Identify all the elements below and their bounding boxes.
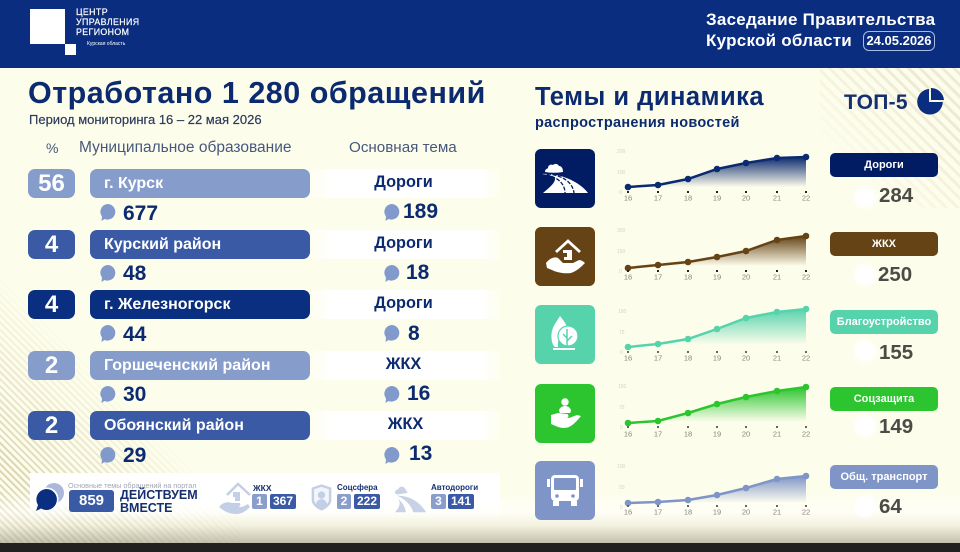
tile: landscaping icon [535,305,595,364]
column heading: municipality: Муниципальное образование [79,139,291,156]
logo text: РЕГИОНОМ [76,27,129,37]
date badge: 24.05.2026 [866,33,932,48]
logo squares [30,9,76,55]
chart: landscaping: 17 [654,354,662,362]
row: Kursk: г. Курск [104,175,163,192]
topic: roads: 141 [451,494,471,508]
topic: roads: Автодороги [431,483,478,492]
row: Zheleznogorsk: 44 [123,323,146,346]
chart: social protection: 75 [619,405,625,411]
logo text: УПРАВЛЕНИЯ [76,17,140,27]
chart: public transport [617,464,810,516]
chart: roads: 21 [773,194,781,202]
portal total: 859 [79,492,104,509]
chart: roads: 20 [742,194,750,202]
row: Zheleznogorsk [28,290,494,346]
tile: roads icon [535,149,595,208]
topic: housing [252,483,296,509]
chart: public transport: 16 [624,508,632,516]
row: Gorshechnoye district [28,351,494,406]
top 5 item: public transport: Общ. транспорт [840,471,928,483]
row: Gorshechnoye district: 16 [407,382,430,405]
row: Kursk: 677 [123,202,158,225]
chart: housing [617,228,810,282]
chart: social protection: 150 [618,384,627,390]
top five label: ТОП-5 [844,91,908,114]
header title [706,10,936,50]
row: Zheleznogorsk: г. Железногорск [104,296,230,313]
right heading: Темы и динамика [535,83,764,111]
right subheading: распространения новостей [535,115,740,131]
row: Kursk [28,169,494,225]
chart: housing: 20 [742,272,750,282]
column heading: main topic: Основная тема [349,139,457,156]
row: Zheleznogorsk: 8 [408,322,420,345]
row: Oboyan district: 13 [409,442,432,465]
row: Kursk district: 4 [45,231,58,258]
chart: social protection: 22 [802,430,810,438]
icon: road [394,486,426,512]
header title: Заседание Правительства [706,10,935,29]
background stripes: bottom left [0,293,204,543]
tile: social protection icon [535,384,595,443]
chart: social protection: 16 [624,430,632,438]
row: Kursk district: Дороги [374,234,433,252]
chart: housing: 16 [624,272,632,282]
chart: housing: 150 [617,249,626,255]
chart: roads: 18 [684,194,692,202]
topic: social [337,483,380,509]
logo text: ЦЕНТР [76,7,108,17]
portal name: ВМЕСТЕ [120,500,172,514]
chart: landscaping: 18 [684,354,692,362]
top 5 item: housing: ЖКХ [872,238,896,250]
top 5 item: landscaping [830,310,938,364]
column heading: percent: % [46,140,58,156]
chart: social protection: 18 [684,430,692,438]
topic: social: Соцсфера [337,483,378,492]
chart: roads: 16 [624,194,632,202]
top 5 item: landscaping: 155 [879,341,913,364]
topic: housing: 1 [256,494,263,508]
topic: housing: 367 [273,494,293,508]
chart: housing: 300 [617,228,626,234]
chart: housing: 21 [773,272,781,282]
top 5 item: roads [830,153,938,208]
chart: social protection: 19 [713,430,721,438]
top 5 item: housing: 250 [878,263,912,286]
top 5 item: landscaping: Благоустройство [837,316,931,328]
chart: landscaping [618,306,810,362]
bottom shade [0,490,960,543]
row: Kursk: 189 [403,200,438,223]
row: Kursk: 56 [38,170,65,197]
row: Gorshechnoye district: 30 [123,383,146,406]
top 5 item: public transport [830,465,938,518]
chart: social protection: 21 [773,430,781,438]
chart: roads: 19 [713,194,721,202]
row: Oboyan district: Обоянский район [104,417,244,434]
chart: landscaping: 150 [618,309,627,315]
icon: pie chart [917,88,944,114]
row: Kursk district [28,230,494,285]
chart: public transport: 18 [684,508,692,516]
topic: roads [431,483,478,509]
bottom portal strip [30,473,500,520]
row: Oboyan district [28,411,494,467]
row: Gorshechnoye district: Горшеченский район [104,357,270,374]
chart: public transport: 50 [619,485,625,491]
row: Oboyan district: 29 [123,444,146,467]
row: Zheleznogorsk: 4 [45,291,58,318]
topic: roads: 3 [435,494,442,508]
icon: housing [219,482,251,514]
chart: roads [617,149,810,202]
chart: public transport: 22 [802,508,810,516]
monitoring period: Период мониторинга 16 – 22 мая 2026 [29,112,262,127]
chart: social protection: 17 [654,430,662,438]
chart: landscaping: 75 [619,330,625,336]
topic: housing: ЖКХ [253,483,272,493]
row: Kursk: Дороги [374,173,433,191]
chart: roads: 0 [619,190,622,196]
top 5 item: roads: Дороги [864,159,904,171]
row: Gorshechnoye district: ЖКХ [386,355,421,373]
chart: roads: 200 [617,149,626,155]
portal name [120,487,198,514]
row: Kursk district: Курский район [104,236,221,253]
tile: housing icon [535,227,595,286]
chart: roads: 22 [802,194,810,202]
row: Zheleznogorsk: Дороги [374,294,433,312]
icon: chat bubbles [36,483,64,511]
header title: Курской области [706,30,852,50]
logo region caption: Курская область [87,41,125,47]
row: Gorshechnoye district: 2 [45,352,58,379]
chart: public transport: 100 [617,464,626,470]
chart: landscaping: 19 [713,354,721,362]
chart: housing: 19 [713,272,721,282]
top 5 item: social protection: 149 [879,415,913,438]
chart: housing: 22 [802,272,810,282]
row: Kursk district: 48 [123,262,146,285]
chart: landscaping: 16 [624,354,632,362]
portal name: ДЕЙСТВУЕМ [120,488,198,502]
chart: public transport: 19 [713,508,721,516]
chart: social protection [618,384,810,438]
chart: public transport: 21 [773,508,781,516]
logo text [76,7,140,37]
portal total [69,490,114,512]
chart: landscaping: 0 [620,350,623,356]
topic: social: 2 [341,494,347,508]
portal caption: Основные темы обращений на портал [68,481,196,490]
chart: roads: 100 [617,170,626,176]
top 5 item: social protection: Соцзащита [854,393,914,405]
chart: public transport: 17 [654,508,662,516]
bottom black bar [0,543,960,552]
main heading: Отработано 1 280 обращений [28,76,486,110]
chart: landscaping: 20 [742,354,750,362]
chart: housing: 0 [619,269,622,275]
chart: housing: 18 [684,272,692,282]
chart: landscaping: 22 [802,354,810,362]
chart: landscaping: 21 [773,354,781,362]
chart: social protection: 0 [620,425,623,431]
background stripes: top right [820,68,960,208]
topic: social: 222 [357,494,377,508]
row: Oboyan district: ЖКХ [388,415,423,433]
chart: public transport: 0 [620,505,623,511]
chart: social protection: 20 [742,430,750,438]
chart: roads: 17 [654,194,662,202]
icon: social shield [312,484,332,510]
date badge [863,31,935,51]
row: Kursk district: 18 [406,261,429,284]
top 5 item: social protection [830,387,938,438]
tile: bus icon [535,461,595,520]
chart: public transport: 20 [742,508,750,516]
row: Oboyan district: 2 [45,412,58,439]
top 5 item: public transport: 64 [879,495,902,518]
header bar [0,0,960,68]
chart: housing: 17 [654,272,662,282]
top 5 item: housing [830,232,938,286]
top 5 item: roads: 284 [879,184,913,207]
